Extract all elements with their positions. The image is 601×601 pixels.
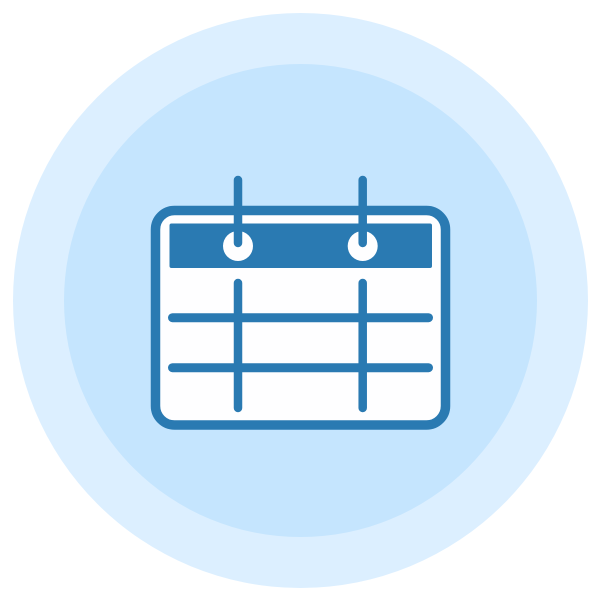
calendar header bar [170,224,432,268]
calendar [156,180,446,425]
calendar grid lines [172,283,428,408]
binding pins [238,180,363,243]
binding ring holes [223,231,378,261]
calendar frame [156,210,446,425]
inner circle background [64,64,537,537]
